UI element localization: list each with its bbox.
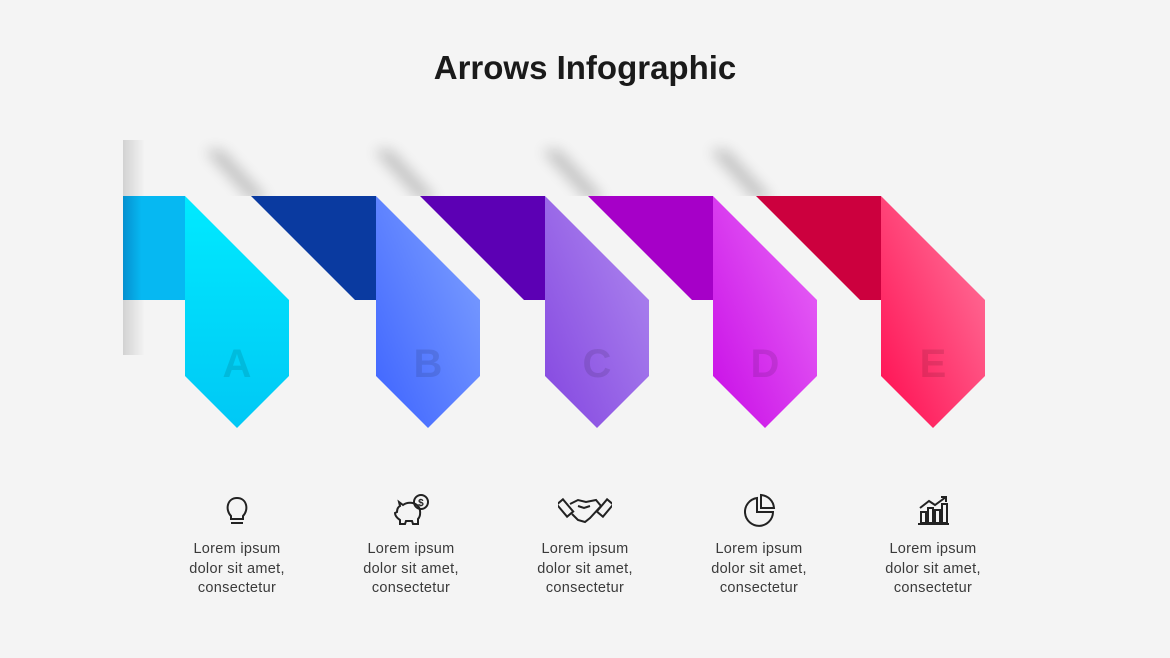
column D [711, 494, 807, 596]
band D [588, 196, 713, 300]
icon: lightbulb [226, 497, 248, 524]
arrow D: D [751, 342, 779, 386]
arrow D [713, 196, 817, 428]
icon: piggy bank [394, 494, 429, 525]
column C: dolor sit amet, [537, 560, 633, 576]
band E [756, 196, 881, 300]
column D: dolor sit amet, [711, 560, 807, 576]
icon: piggy bank: $ [418, 498, 424, 509]
icon: handshake [558, 498, 612, 524]
column E: Lorem ipsum [889, 541, 977, 557]
arrows graphic [123, 140, 985, 428]
band B [251, 196, 376, 300]
column B: dolor sit amet, [363, 560, 459, 576]
column E: dolor sit amet, [885, 560, 981, 576]
column E: consectetur [894, 580, 972, 596]
column D: Lorem ipsum [715, 541, 803, 557]
shadows [123, 140, 773, 355]
icon: bar chart growth [918, 496, 949, 525]
band A [123, 196, 185, 300]
column A: dolor sit amet, [189, 560, 285, 576]
arrow A [185, 196, 289, 428]
column A: consectetur [198, 580, 276, 596]
column B: consectetur [372, 580, 450, 596]
column A: Lorem ipsum [193, 541, 281, 557]
title: Arrows Infographic [434, 49, 736, 86]
icon: pie chart [744, 494, 776, 527]
arrow E: E [920, 342, 946, 386]
column C: Lorem ipsum [541, 541, 629, 557]
arrow A: A [223, 342, 251, 386]
column C: consectetur [546, 580, 624, 596]
column C [537, 498, 633, 596]
arrow C: C [583, 342, 611, 386]
arrow B: B [414, 342, 442, 386]
arrow B [376, 196, 480, 428]
column E [885, 496, 981, 596]
column B: Lorem ipsum [367, 541, 455, 557]
arrow E [881, 196, 985, 428]
column A [189, 497, 285, 596]
column D: consectetur [720, 580, 798, 596]
arrow C [545, 196, 649, 428]
column B [363, 494, 459, 596]
band C [420, 196, 545, 300]
